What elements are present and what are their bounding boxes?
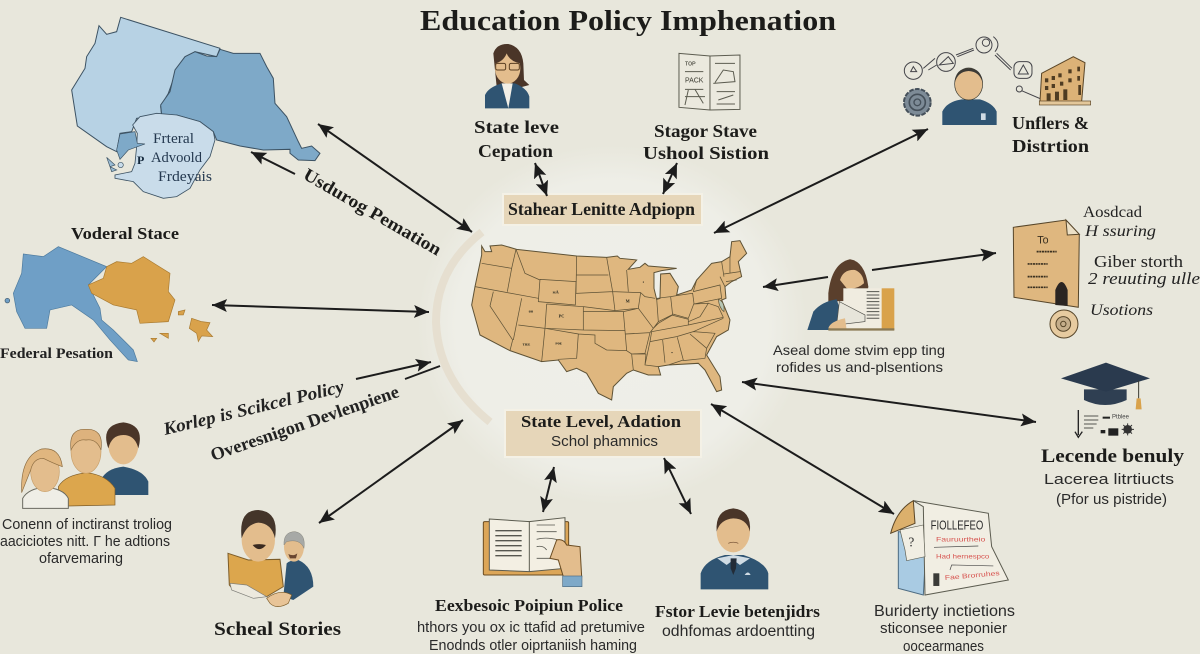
map labels: federal advoold: P	[137, 153, 144, 167]
map labels: federal advoold: Advoold	[151, 150, 203, 166]
map: contiguous United States: •	[643, 279, 645, 284]
rotated label: Usdurog Pemation: Usdurog Pemation	[300, 164, 445, 259]
map: contiguous United States: PC	[559, 314, 564, 319]
icon: graduation cap and legend glyphs: Ptblee	[1112, 414, 1130, 420]
text: three people caption: aaciciotes nitt. Γ he adtions	[0, 534, 170, 550]
label: Eexbesoic Poipiun Police: Eexbesoic Poipiun Police	[435, 596, 623, 615]
label: Stagor Stave Ushool Sistion: Ushool Sistion	[643, 143, 769, 163]
icon: woman reading a book	[807, 259, 894, 331]
icon: document with door: To	[1037, 234, 1049, 246]
box: bottom state level adaptation: Schol phamnics	[551, 433, 658, 450]
map: contiguous United States: M	[626, 299, 630, 304]
map: contiguous United States: мА	[553, 289, 560, 294]
label: Unflers & Distrtion: Unflers &	[1012, 113, 1089, 133]
label: State leve Cepation	[474, 117, 559, 161]
text: document notes: Giber storth	[1094, 252, 1184, 271]
text: document notes: Usotions	[1090, 302, 1153, 319]
icon: policy poster document: FIOLLEFEO	[931, 517, 983, 532]
icon: graduation cap and legend glyphs	[1061, 363, 1150, 437]
rotated label: Overesnigon Devlenpiene: Overesnigon Devlenpiene	[208, 381, 402, 465]
map labels: federal advoold	[137, 131, 212, 185]
text: document notes: Aosdcad	[1083, 204, 1142, 221]
box: bottom state level adaptation: State Level, Adation	[521, 412, 682, 431]
icon: document with door	[1013, 220, 1079, 338]
label: Federal Pesation: Federal Pesation	[0, 346, 113, 362]
label: Lecende benuly: Lacerea litrtiucts	[1044, 471, 1174, 488]
map: blue and orange federal/state	[5, 247, 213, 362]
icon: policy poster document	[891, 501, 1008, 595]
label: State leve Cepation: State leve	[474, 117, 559, 137]
icon: open policy book: PACK	[685, 78, 704, 85]
text: Buriderty caption	[874, 603, 1015, 654]
icon: policy poster document: Fae Brorruhes	[945, 570, 1001, 582]
map labels: federal advoold: Frdeyais	[158, 169, 212, 185]
icon: policy poster document: ?	[908, 535, 914, 550]
label: Eexbesoic Poipiun Police	[417, 596, 645, 654]
map: contiguous United States: ᴕᴕ	[529, 309, 534, 314]
icon: man in sweater and tie	[701, 508, 768, 589]
icon: policy poster document: Had hernespco	[936, 553, 990, 560]
text: Buriderty caption: sticonsee neponier	[880, 620, 1007, 637]
label: Fstor Levie	[655, 602, 820, 640]
map: contiguous United States: ᴘᴏᴇ	[555, 341, 562, 346]
text: three people caption: ofarvemaring	[39, 551, 123, 567]
icon: open policy book: ᴛᴏᴘ	[685, 60, 696, 67]
text: reader caption: rofides us and-plsentions	[776, 359, 943, 375]
icon: group of three people	[22, 422, 148, 508]
icon: policy poster document: Fauruurtheio	[936, 537, 986, 544]
box: top state adoption	[503, 194, 702, 225]
map: contiguous United States: •	[671, 350, 673, 355]
label: Stagor Stave Ushool Sistion: Stagor Stave	[654, 121, 757, 141]
label: Stagor Stave Ushool Sistion	[643, 121, 769, 163]
arc around central map	[436, 232, 490, 422]
map: contiguous United States	[472, 241, 747, 400]
text: document notes: 2 reuuting ulle	[1088, 269, 1200, 288]
label: Unflers & Distrtion	[1012, 113, 1089, 156]
icon: administrator with gears and school building	[904, 37, 1091, 125]
text: reader caption	[773, 342, 945, 375]
label: Unflers & Distrtion: Distrtion	[1012, 136, 1089, 156]
text: Buriderty caption: Buriderty inctietions	[874, 603, 1015, 620]
icon: woman with glasses	[485, 44, 529, 108]
label: Lecende benuly: Lecende benuly	[1041, 447, 1185, 467]
label: Eexbesoic Poipiun Police: hthors you ox ic ttafid ad pretumive	[417, 620, 645, 636]
rotated label: Korlep is Scikcel Policy: Korlep is Scikcel Policy	[160, 376, 347, 439]
icon: open policy book	[679, 53, 740, 110]
label: State leve Cepation: Cepation	[478, 141, 553, 161]
label: Lecende benuly	[1041, 447, 1185, 508]
map: federal regions top-left	[72, 17, 320, 198]
arrows: connecting central map with surrounding nodes	[212, 124, 1036, 523]
map labels: federal advoold: Frteral	[153, 131, 194, 147]
label: Lecende benuly: (Pfor us pistride)	[1056, 491, 1167, 508]
label: Eexbesoic Poipiun Police: Enodnds otler oiprtaniish haming	[429, 638, 637, 654]
box: bottom state level adaptation	[505, 410, 701, 457]
icon: open book with hand	[483, 518, 582, 587]
icon: two people with a folder	[228, 510, 313, 607]
map: contiguous United States: ᴛɪᴇᴇ	[523, 342, 530, 347]
text: reader caption: Aseal dome stvim epp ting	[773, 342, 945, 358]
heading: Voderal Stace: Voderal Stace	[71, 224, 179, 243]
text: three people caption: Conenn of inctiranst troliog	[2, 517, 172, 533]
text: three people caption	[0, 517, 172, 567]
text: document notes: H ssuring	[1084, 223, 1156, 240]
text: document notes	[1083, 204, 1200, 319]
label: Scheal Stories: Scheal Stories	[214, 619, 341, 640]
label: Fstor Levie: Fstor Levie betenjidrs	[655, 602, 820, 621]
box: top state adoption: Stahear Lenitte Adpiopn	[508, 199, 695, 219]
label: Fstor Levie: odhfomas ardoentting	[662, 623, 815, 640]
title: Education Policy Imphenation	[420, 6, 836, 37]
